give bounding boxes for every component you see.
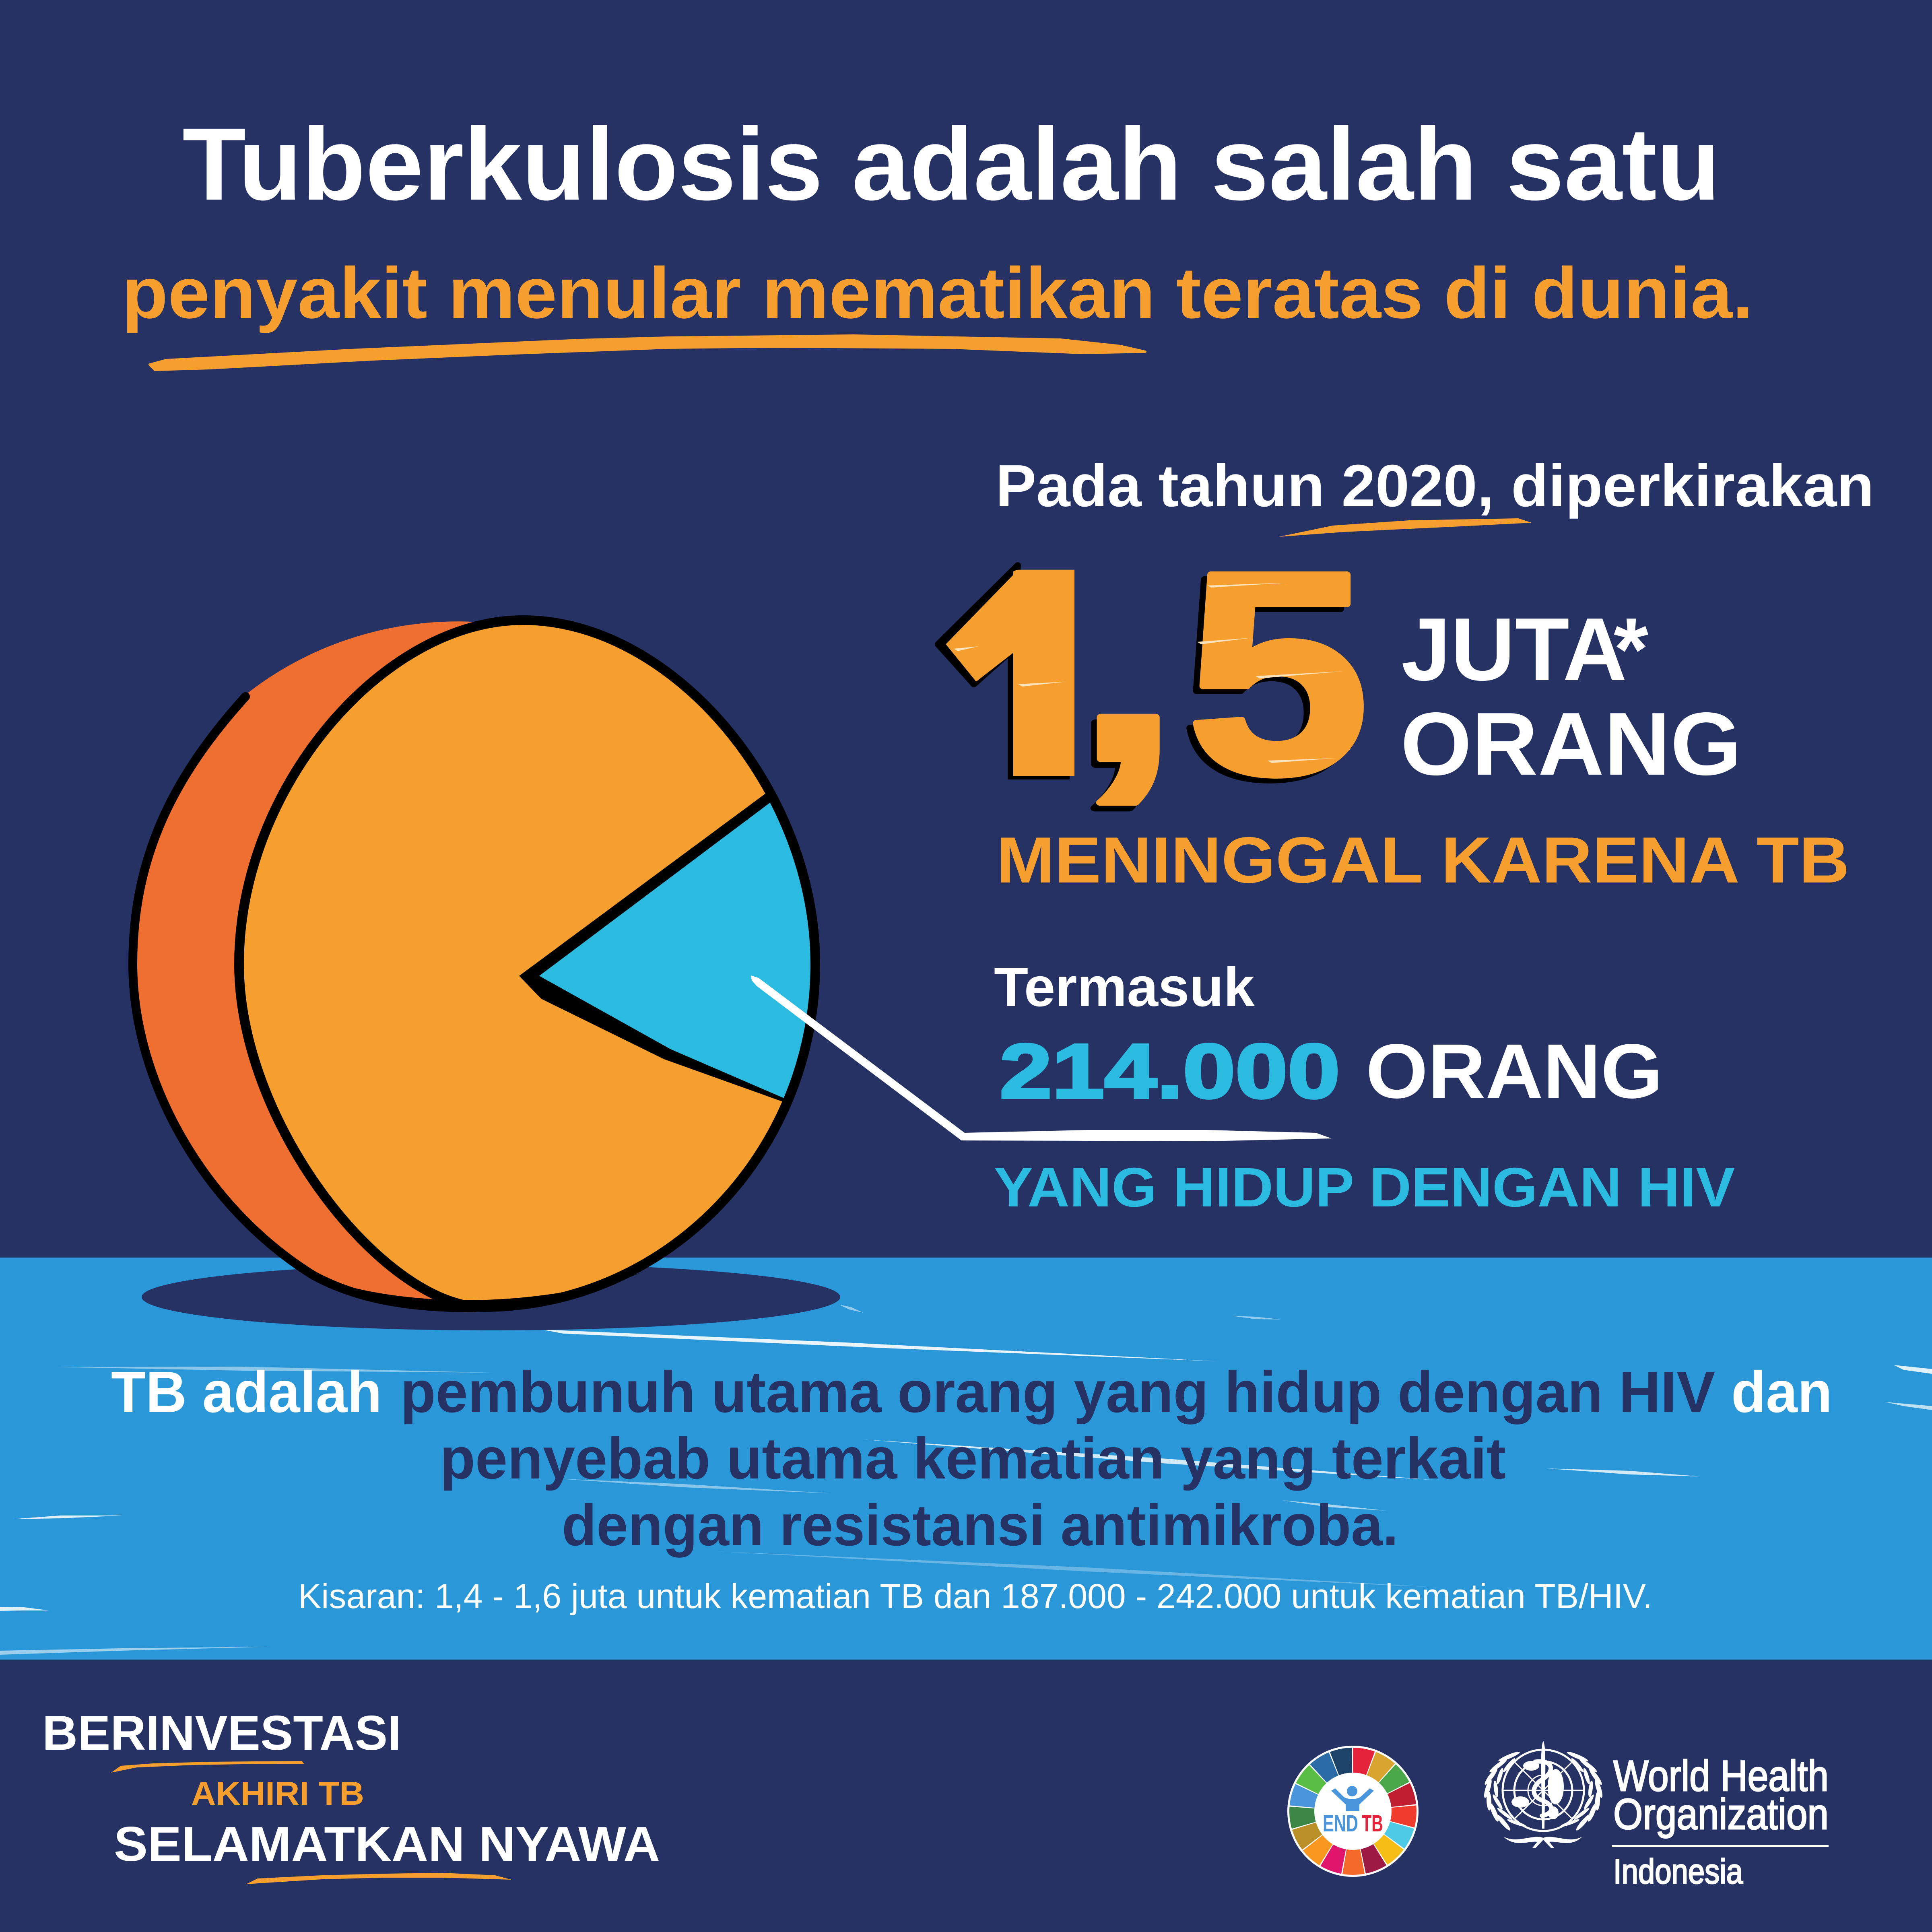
END TB logo: TB xyxy=(1362,1810,1383,1837)
ribbon xyxy=(1503,1837,1582,1848)
juta orang label: JUTA xyxy=(1401,600,1627,699)
band text block: dengan resistansi antimikroba. xyxy=(562,1493,1398,1558)
number shadow: , xyxy=(1069,510,1175,825)
number shadow: 5 xyxy=(1180,517,1363,839)
staff and serpent xyxy=(1541,1741,1545,1829)
slogan: SELAMATKAN NYAWA xyxy=(114,1817,660,1871)
2020 underline stroke xyxy=(1278,518,1532,537)
slogan: AKHIRI TB xyxy=(191,1775,364,1812)
title xyxy=(122,107,1753,334)
214.000 orang xyxy=(1000,1028,1663,1114)
pie chart shadow xyxy=(142,1264,840,1330)
panel: blue water band xyxy=(0,1258,1932,1660)
band text block xyxy=(111,1359,1832,1558)
slogan underline 1 xyxy=(111,1761,304,1773)
number face xyxy=(916,504,1369,837)
person icon xyxy=(1331,1786,1374,1811)
pie chart xyxy=(133,620,853,1308)
juta orang label: ORANG xyxy=(1400,694,1742,794)
slogan xyxy=(42,1705,660,1884)
slogan underline 2 xyxy=(246,1873,511,1884)
juta orang label: * xyxy=(1614,600,1649,699)
slogan: BERINVESTASI xyxy=(42,1705,401,1760)
number scratches xyxy=(954,583,1344,763)
pie front face xyxy=(239,620,815,1307)
subtitle: penyakit menular mematikan teratas di dunia. xyxy=(122,253,1753,334)
number face: 5 xyxy=(1186,512,1369,834)
WHO wordmark xyxy=(1612,1751,1829,1891)
band text block: pembunuh utama orang yang hidup dengan HIV xyxy=(400,1359,1715,1425)
yang hidup dengan HIV: YANG HIDUP DENGAN HIV xyxy=(994,1157,1735,1219)
214.000 orang: ORANG xyxy=(1366,1028,1663,1114)
range footnote: Kisaran: 1,4 - 1,6 juta untuk kematian TB dan 187.000 - 242.000 untuk kematian TB/HIV. xyxy=(298,1577,1652,1616)
214.000 orang: 214.000 xyxy=(1000,1028,1340,1114)
meninggal karena TB: MENINGGAL KARENA TB xyxy=(996,824,1850,897)
band text block: TB adalah xyxy=(111,1359,382,1425)
END TB logo xyxy=(1281,1739,1425,1883)
leader line from wedge to 214.000 xyxy=(751,975,1332,1141)
termasuk: Termasuk xyxy=(994,956,1255,1018)
number face: , xyxy=(1074,504,1181,819)
big number 1,5 xyxy=(910,504,1369,841)
globe rings xyxy=(1503,1750,1584,1831)
band text block: dan xyxy=(1731,1359,1832,1425)
pie wedge: HIV share xyxy=(519,794,810,1102)
END TB logo: END xyxy=(1323,1810,1358,1837)
number shadow: 1 xyxy=(910,513,1147,841)
pie base thick stroke xyxy=(314,1272,644,1307)
WHO emblem xyxy=(1483,1741,1604,1848)
number face: 1 xyxy=(916,509,1153,837)
number shadow xyxy=(910,510,1363,841)
WHO wordmark: Indonesia xyxy=(1613,1852,1743,1891)
WHO wordmark: World Health xyxy=(1613,1751,1829,1800)
juta orang label xyxy=(1400,600,1742,794)
title: Tuberkulosis adalah salah satu xyxy=(182,107,1720,222)
laurel wreath xyxy=(1483,1750,1604,1831)
intro text: Pada tahun 2020, diperkirakan xyxy=(996,453,1874,519)
WHO wordmark: Organization xyxy=(1613,1790,1829,1838)
globe land xyxy=(1511,1761,1564,1819)
title underline stroke xyxy=(150,336,1145,370)
pie side xyxy=(133,621,523,1308)
pie side outline xyxy=(133,697,475,1308)
band text block: penyebab utama kematian yang terkait xyxy=(440,1426,1506,1491)
pie front outline xyxy=(239,620,815,1307)
